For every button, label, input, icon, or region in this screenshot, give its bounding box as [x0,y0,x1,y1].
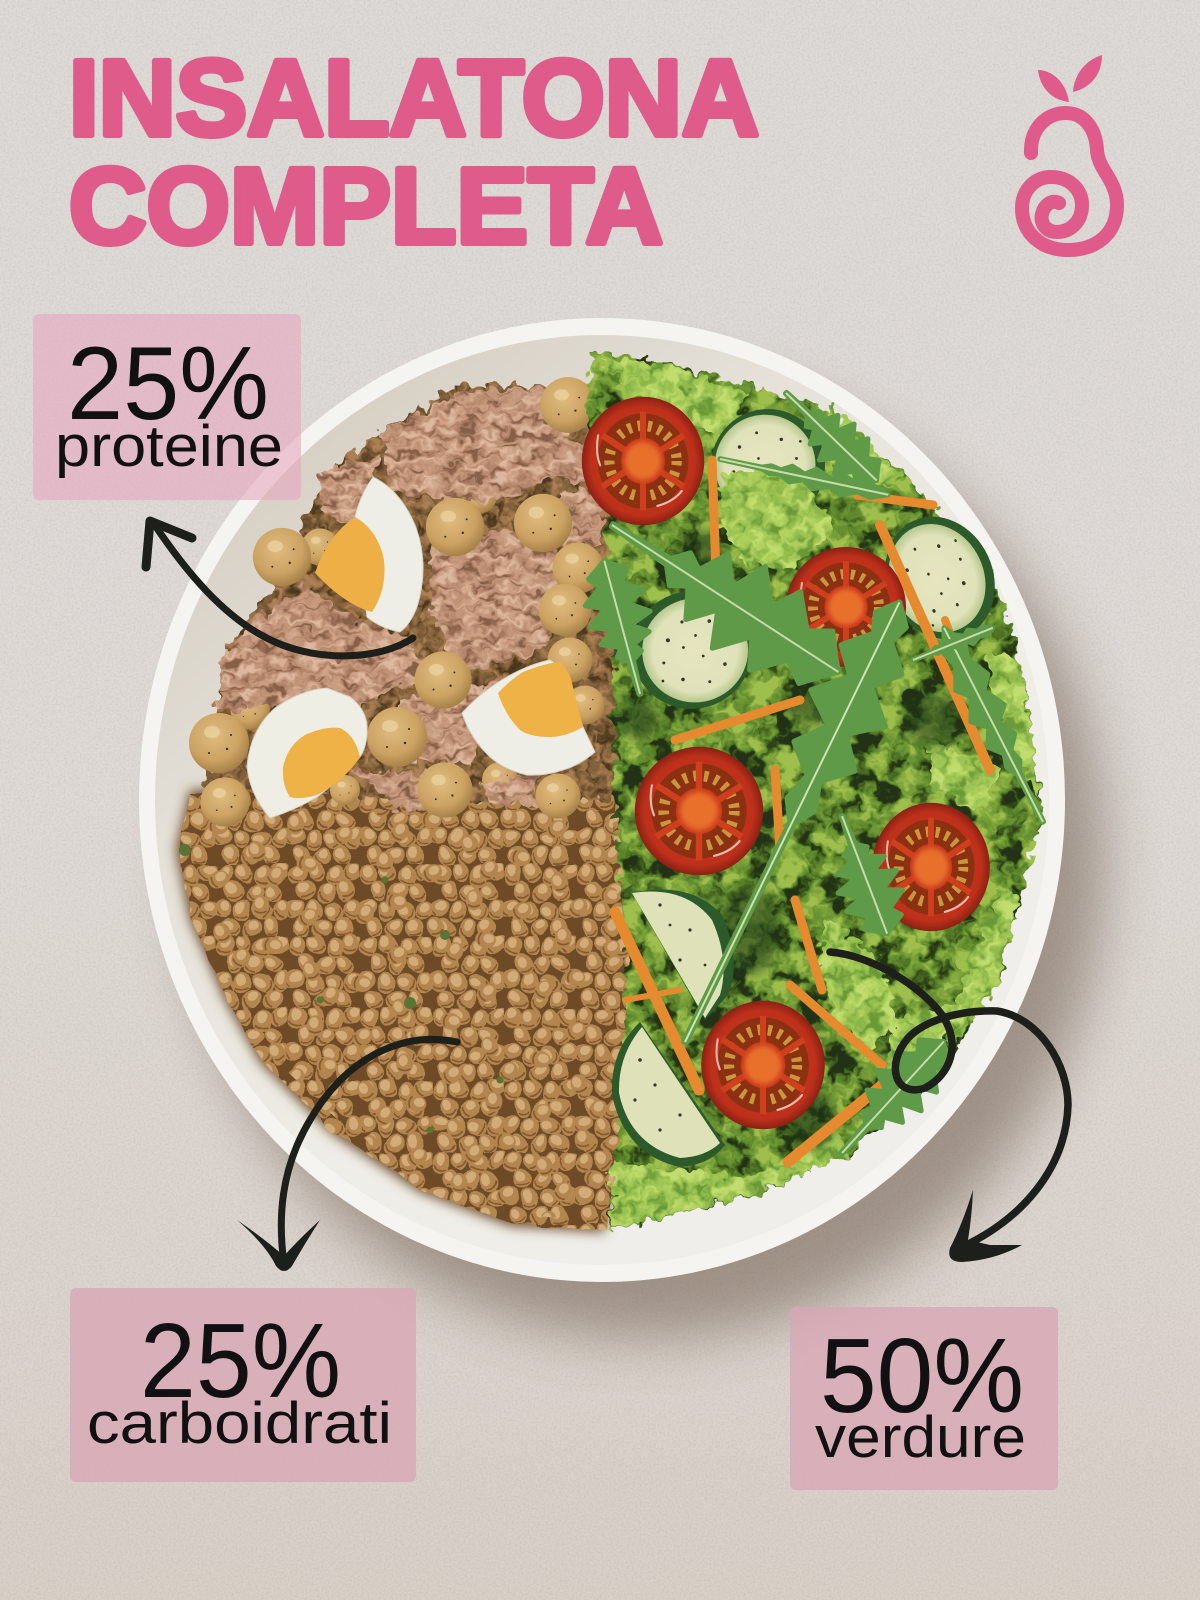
leaf left [1038,70,1069,102]
half cucumber upper [632,889,734,1020]
label: verdure: verdure [815,1405,1026,1470]
tomatoes [582,397,704,525]
title: INSALATONA [69,37,759,158]
value: 50%: 50% [820,1317,1024,1435]
food: egg top [315,477,423,632]
food: chickpeas under [230,411,604,805]
arrow: to verdure [830,952,1068,1262]
callout: verdure [790,1307,1058,1490]
food: grains (carbohydrates) [176,788,630,1232]
food: mixed base under tuna and chickpeas [190,370,630,820]
food: tuna [215,384,606,823]
leaf right [1073,55,1102,92]
food: egg right [462,660,595,775]
arugula leaves [769,375,894,499]
title: COMPLETA [69,145,663,266]
callout: proteine [33,314,301,500]
lettuce over top cucumber [718,468,834,570]
label: proteine: proteine [55,414,283,479]
arrow: to carboidrati [237,1039,457,1271]
icon: pear logo [1022,55,1117,250]
arrow: to proteine [146,521,413,656]
dark shadow gaps [620,530,965,1150]
bowl [139,318,1065,1282]
food: chickpeas [189,377,604,827]
half cucumber lower [612,1022,725,1167]
bowl shadow [185,378,1105,1338]
title [69,37,759,266]
lettuce base [570,340,1060,1240]
herbs in grains [179,788,504,1134]
callout: carboidrati [70,1288,416,1482]
value: 25%: 25% [140,1302,341,1420]
carrot strips [615,460,990,1162]
food: egg lower left [247,688,367,818]
cucumber slices [711,409,825,523]
lettuce light frills [600,350,1050,1230]
food: salad greens [570,340,1060,1240]
value: 25%: 25% [67,326,269,442]
label: carboidrati: carboidrati [87,1391,392,1456]
